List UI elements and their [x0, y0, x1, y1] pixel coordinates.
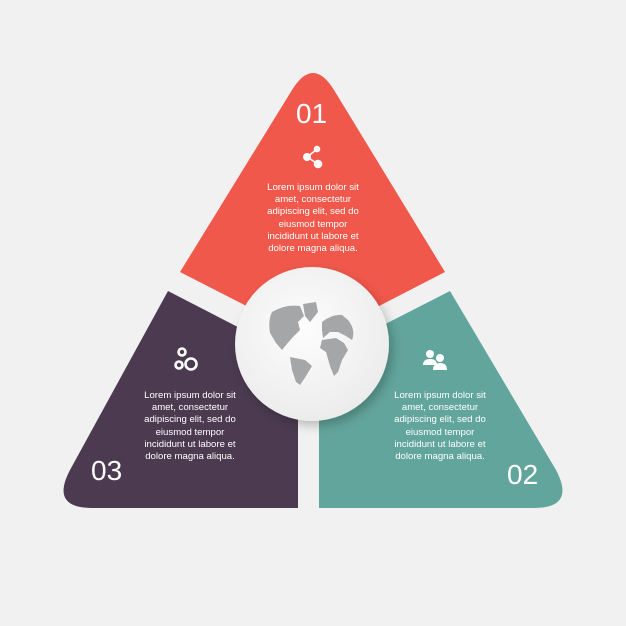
number 01: 01: [296, 98, 327, 129]
icon: gears: [174, 347, 198, 371]
icon: globe: [269, 302, 353, 385]
panel: 03 purple: [64, 291, 298, 508]
text: panel 02: incididunt ut labore et: [394, 439, 486, 450]
number 02: 02: [507, 459, 538, 490]
text: panel 03: dolore magna aliqua.: [145, 451, 235, 462]
text: panel 03: incididunt ut labore et: [144, 439, 236, 450]
text: panel 01: [267, 182, 359, 254]
text: panel 03: adipiscing elit, sed do: [144, 414, 236, 425]
center circle: [235, 267, 389, 421]
number 03: 03: [91, 455, 122, 486]
text: panel 01: Lorem ipsum dolor sit: [267, 182, 359, 193]
icon: share: [303, 146, 322, 168]
text: panel 02: eiusmod tempor: [406, 427, 474, 438]
text: panel 02: dolore magna aliqua.: [395, 451, 485, 462]
text: panel 03: eiusmod tempor: [156, 427, 224, 438]
text: panel 02: [394, 390, 486, 462]
text: panel 02: Lorem ipsum dolor sit: [394, 390, 486, 401]
text: panel 03: [144, 390, 236, 462]
text: panel 01: eiusmod tempor: [279, 219, 347, 230]
text: panel 01: amet, consectetur: [275, 194, 351, 205]
text: panel 01: incididunt ut labore et: [267, 231, 359, 242]
text: panel 02: adipiscing elit, sed do: [394, 414, 486, 425]
text: panel 03: amet, consectetur: [152, 402, 228, 413]
panel: 01 red: [180, 73, 445, 340]
icon: users: [423, 350, 447, 370]
text: panel 01: dolore magna aliqua.: [268, 243, 358, 254]
text: panel 03: Lorem ipsum dolor sit: [144, 390, 236, 401]
text: panel 01: adipiscing elit, sed do: [267, 206, 359, 217]
text: panel 02: amet, consectetur: [402, 402, 478, 413]
panel: 02 teal: [319, 291, 562, 508]
